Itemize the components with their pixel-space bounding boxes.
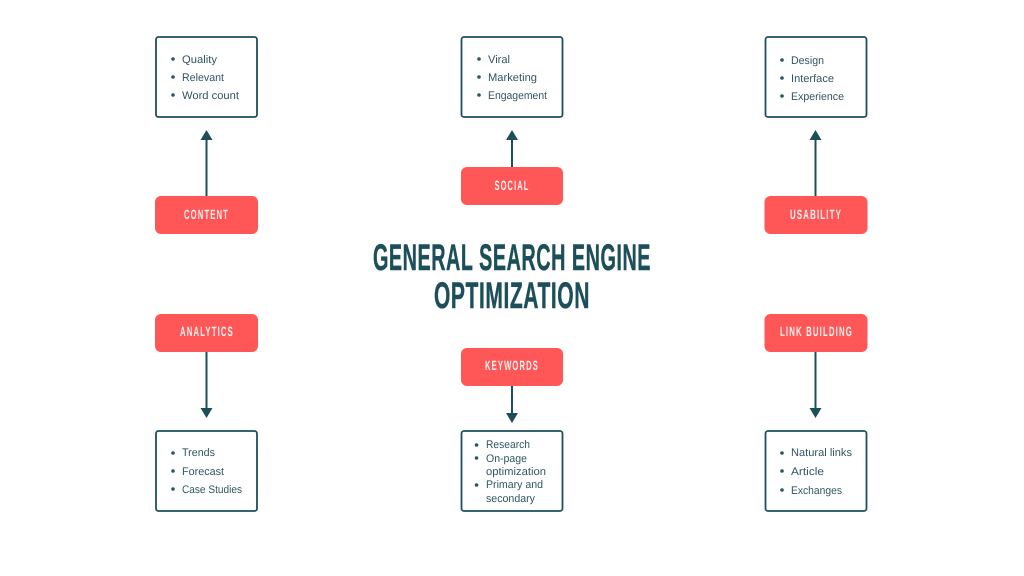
title: GENERAL SEARCH ENGINE	[373, 237, 651, 278]
social label	[461, 167, 563, 205]
social list box	[462, 37, 562, 117]
arrow: usability up	[810, 130, 822, 196]
link building list box	[766, 431, 866, 511]
keywords label	[461, 348, 563, 386]
social list box: Engagement	[488, 90, 547, 102]
arrow: keywords down	[506, 386, 518, 423]
analytics list box: Trends	[182, 447, 215, 459]
analytics list box: Case Studies	[182, 484, 242, 496]
content list box: Word count	[182, 90, 239, 102]
usability list box: Experience	[791, 91, 844, 103]
keywords list box: Primary and	[486, 479, 543, 491]
panel: keywords	[461, 348, 563, 511]
arrow: analytics down	[200, 352, 212, 418]
arrow: social up	[506, 130, 518, 167]
analytics label	[155, 314, 258, 352]
analytics list box: Forecast	[182, 466, 224, 478]
title	[373, 237, 651, 316]
analytics list box	[156, 431, 257, 511]
social list box: Marketing	[488, 72, 537, 84]
content label: CONTENT	[184, 207, 229, 222]
panel: analytics	[155, 314, 258, 511]
link building list box: Natural links	[791, 447, 852, 459]
link building label	[764, 314, 868, 352]
analytics label: ANALYTICS	[180, 324, 234, 339]
usability label: USABILITY	[790, 207, 842, 222]
keywords list box: optimization	[486, 466, 546, 478]
keywords list box: Research	[486, 439, 530, 451]
panel: content	[155, 37, 258, 234]
content label	[155, 196, 258, 234]
content list box	[156, 37, 257, 117]
arrow: link building down	[810, 352, 822, 418]
panel: social	[461, 37, 563, 205]
usability list box: Interface	[791, 73, 834, 85]
title: OPTIMIZATION	[434, 275, 590, 316]
keywords list box	[462, 431, 562, 511]
usability list box	[766, 37, 866, 117]
link building label: LINK BUILDING	[780, 324, 853, 339]
keywords label: KEYWORDS	[485, 358, 539, 373]
link building list box: Exchanges	[791, 485, 842, 497]
social label: SOCIAL	[494, 178, 530, 193]
keywords list box: secondary	[486, 493, 535, 505]
panel: usability	[764, 37, 868, 234]
arrow: content up	[200, 130, 212, 196]
panel: link building	[764, 314, 868, 511]
link building list box: Article	[791, 466, 824, 478]
content list box: Relevant	[182, 72, 224, 84]
usability label	[764, 196, 868, 234]
content list box: Quality	[182, 54, 217, 66]
social list box: Viral	[488, 54, 510, 66]
usability list box: Design	[791, 55, 824, 67]
keywords list box: On-page	[486, 453, 527, 465]
